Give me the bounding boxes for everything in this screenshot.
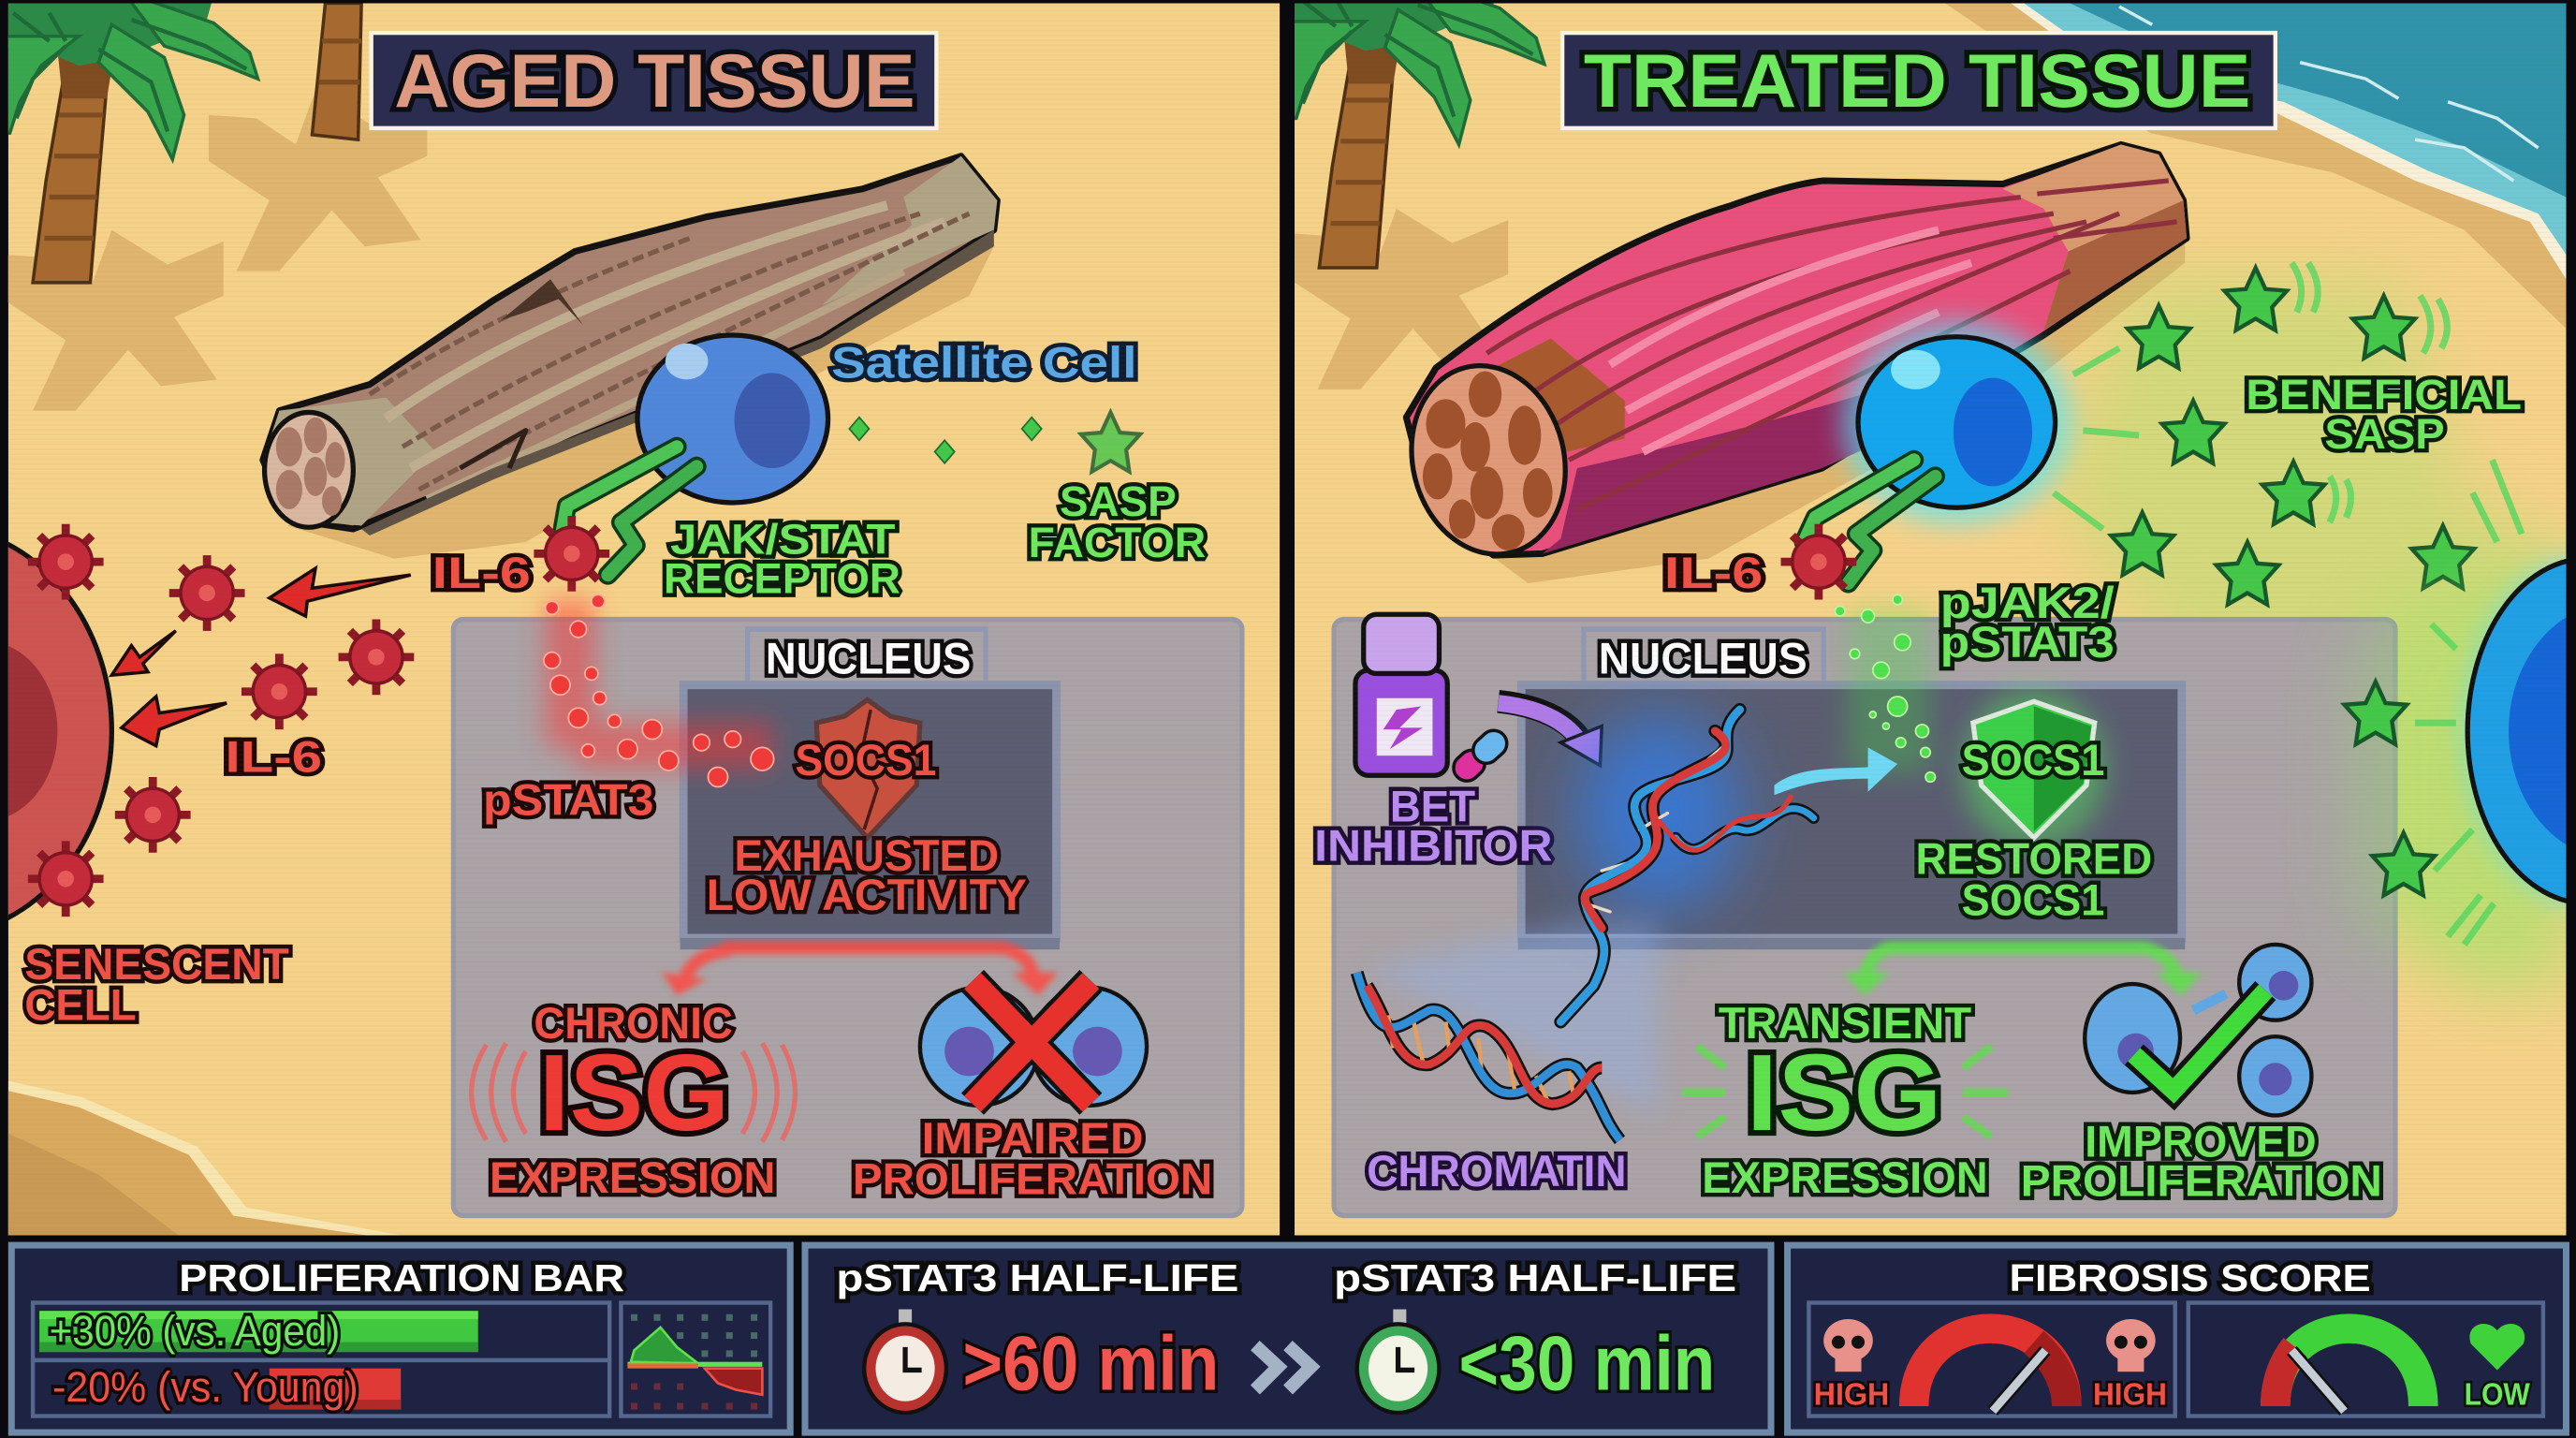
label: beneficial SASP: BENEFICIAL	[2246, 371, 2522, 418]
icon: medicine bottle	[1355, 614, 1513, 786]
arrow: cyan	[1775, 747, 1897, 795]
activated satellite cell	[1841, 320, 2071, 524]
senescent cell	[7, 541, 114, 921]
expression waves	[472, 1043, 795, 1142]
sea	[2011, 4, 2566, 279]
label: exhausted low activity	[707, 831, 1027, 920]
label: pJAK2/pSTAT3: pJAK2/	[1940, 579, 2115, 628]
title: treated tissue: TREATED TISSUE	[1584, 39, 2250, 124]
SASP particles	[849, 418, 1042, 463]
green SASP glow	[2054, 279, 2566, 986]
label: JAK/STAT receptor: JAK/STAT	[670, 515, 896, 563]
green rays	[1682, 1047, 2008, 1137]
label: BET inhibitor: INHIBITOR	[1314, 821, 1553, 871]
panel: pSTAT3 half-life	[805, 1245, 1771, 1432]
nucleus box	[683, 685, 1057, 938]
label: exhausted low activity: LOW ACTIVITY	[707, 871, 1027, 920]
icon: skull right	[2106, 1319, 2156, 1372]
pJAK2 dots	[1835, 594, 1936, 782]
gauge high	[1914, 1328, 2067, 1411]
label: IL-6: IL-6	[1664, 549, 1763, 598]
label: JAK/STAT receptor	[664, 515, 900, 602]
value +30%: +30% (vs. Aged)	[50, 1307, 340, 1355]
icon: red stopwatch	[864, 1310, 946, 1413]
label: beneficial SASP	[2246, 371, 2522, 458]
panel: gray signalling box	[453, 620, 1242, 1215]
icon: capsule	[1448, 725, 1513, 786]
label: restored SOCS1: RESTORED	[1915, 835, 2152, 885]
label: expression: EXPRESSION	[1702, 1153, 1988, 1203]
muscle cross-section	[265, 412, 353, 527]
sand background	[8, 4, 1280, 1236]
label: BET inhibitor: BET	[1390, 782, 1475, 831]
nucleus tab	[748, 629, 986, 688]
motion strokes	[2054, 263, 2522, 542]
SASP star	[1081, 412, 1140, 472]
arrows: outcomes	[1843, 947, 2202, 995]
muscle shadow	[1429, 238, 2185, 583]
arrows: outcomes	[662, 947, 1058, 995]
green bar	[39, 1311, 478, 1352]
aged muscle fiber	[263, 156, 997, 536]
label: chromatin: CHROMATIN	[1367, 1147, 1627, 1196]
stars near cell	[2345, 682, 2435, 895]
label: exhausted low activity: EXHAUSTED	[735, 831, 999, 881]
heading: FIBROSIS SCORE	[2009, 1256, 2371, 1299]
label: restored SOCS1	[1915, 835, 2152, 925]
beneficial SASP stars	[2111, 268, 2474, 605]
red bar	[270, 1369, 401, 1410]
arrows: IL-6 to senescent cell	[111, 568, 411, 746]
label: SOCS1: SOCS1	[1962, 736, 2104, 785]
label: SOCS1: SOCS1	[795, 736, 936, 785]
label: SASP factor	[1029, 477, 1206, 566]
palm trunk	[312, 4, 361, 139]
heading left: pSTAT3 HALF-LIFE	[836, 1256, 1238, 1299]
label: improved proliferation: PROLIFERATION	[2021, 1156, 2382, 1206]
wet sand	[1945, 4, 2566, 329]
label: ISG: ISG	[539, 1032, 729, 1153]
green glow over box	[2349, 559, 2566, 986]
label: chronic: CHRONIC	[534, 999, 733, 1049]
receptor	[562, 447, 696, 575]
panel: treated tissue	[1270, 0, 2576, 1236]
muscle fiber shadow	[287, 246, 994, 559]
label: SASP factor: SASP	[1060, 477, 1177, 525]
IL-6 particle	[1781, 524, 1856, 599]
inner frames	[1808, 1302, 2543, 1416]
satellite cell	[637, 335, 828, 503]
label: impaired proliferation: PROLIFERATION	[853, 1155, 1212, 1205]
label: restored SOCS1: SOCS1	[1962, 875, 2104, 925]
label: IL-6 top: IL-6	[432, 549, 531, 598]
panel: gray signalling box	[1334, 620, 2395, 1215]
label: senescent cell: CELL	[24, 981, 137, 1031]
label: nucleus: NUCLEUS	[766, 634, 971, 683]
label: satellite cell: Satellite Cell	[831, 339, 1137, 389]
label: pSTAT3: pSTAT3	[483, 775, 654, 825]
mini chart	[627, 1314, 762, 1410]
label: high: HIGH	[1814, 1377, 1889, 1412]
chevrons	[1255, 1345, 1311, 1389]
icon: cracked shield	[816, 700, 920, 838]
value <30 min: <30 min	[1459, 1321, 1715, 1406]
panel: aged tissue	[0, 0, 1280, 1237]
label: improved proliferation: IMPROVED	[2085, 1117, 2317, 1167]
icon: impaired cells with X	[920, 981, 1147, 1106]
chromatin helix	[1357, 973, 1620, 1140]
icon: restored shield	[1962, 690, 2106, 847]
label: JAK/STAT receptor: RECEPTOR	[664, 554, 900, 602]
panel: proliferation bar	[11, 1245, 790, 1432]
icon: skull left	[1823, 1319, 1873, 1372]
palm tree	[1270, 0, 1544, 268]
adjacent cell	[2465, 555, 2576, 907]
value -20%: -20% (vs. Young)	[52, 1363, 359, 1411]
muscle cross-section	[1392, 349, 1585, 571]
nucleus box	[1521, 685, 2182, 938]
palm shadows	[5, 91, 427, 411]
title: aged tissue: AGED TISSUE	[394, 39, 915, 124]
label: SASP factor: FACTOR	[1029, 519, 1206, 566]
label: BET inhibitor	[1314, 782, 1553, 871]
IL-6 virus particles	[28, 516, 609, 917]
icon: green stopwatch	[1357, 1310, 1439, 1413]
heading right: pSTAT3 HALF-LIFE	[1334, 1256, 1736, 1299]
label: beneficial SASP: SASP	[2324, 410, 2445, 458]
label: pJAK2/pSTAT3: pSTAT3	[1940, 618, 2115, 668]
label: IL-6 lower: IL-6	[225, 733, 322, 783]
label: expression: EXPRESSION	[490, 1153, 775, 1203]
nucleus tab	[1584, 629, 1823, 688]
label: impaired proliferation: IMPAIRED	[922, 1114, 1144, 1164]
label: senescent cell	[24, 940, 289, 1031]
palm shadow	[1290, 209, 1508, 389]
gauge low	[2276, 1328, 2423, 1411]
panel: fibrosis score	[1788, 1245, 2566, 1432]
DNA helix	[1560, 710, 1814, 1021]
receptor	[1804, 460, 1936, 583]
label: impaired proliferation	[853, 1114, 1212, 1205]
motion strokes near cell	[2415, 624, 2494, 945]
icon: heart	[2469, 1324, 2525, 1370]
label: senescent cell: SENESCENT	[24, 940, 289, 990]
label: transient: TRANSIENT	[1719, 999, 1971, 1049]
pSTAT3 dots	[544, 594, 774, 787]
heading: PROLIFERATION BAR	[179, 1256, 624, 1299]
value >60 min: >60 min	[962, 1321, 1219, 1406]
icon: dividing cells with check	[2085, 945, 2311, 1115]
label: ISG: ISG	[1747, 1032, 1942, 1153]
treated muscle fiber	[1392, 144, 2187, 571]
label: low: LOW	[2465, 1377, 2530, 1412]
wet sand shore	[8, 1081, 411, 1237]
palm tree	[0, 0, 258, 283]
label: improved proliferation	[2021, 1117, 2382, 1206]
sand background	[1295, 4, 2566, 1236]
label: pJAK2/pSTAT3	[1940, 579, 2115, 668]
inner frames	[33, 1302, 770, 1416]
label: high: HIGH	[2093, 1377, 2167, 1412]
label: nucleus: NUCLEUS	[1599, 634, 1808, 683]
blue glow	[1364, 714, 1741, 1117]
arrow: purple	[1499, 701, 1602, 766]
